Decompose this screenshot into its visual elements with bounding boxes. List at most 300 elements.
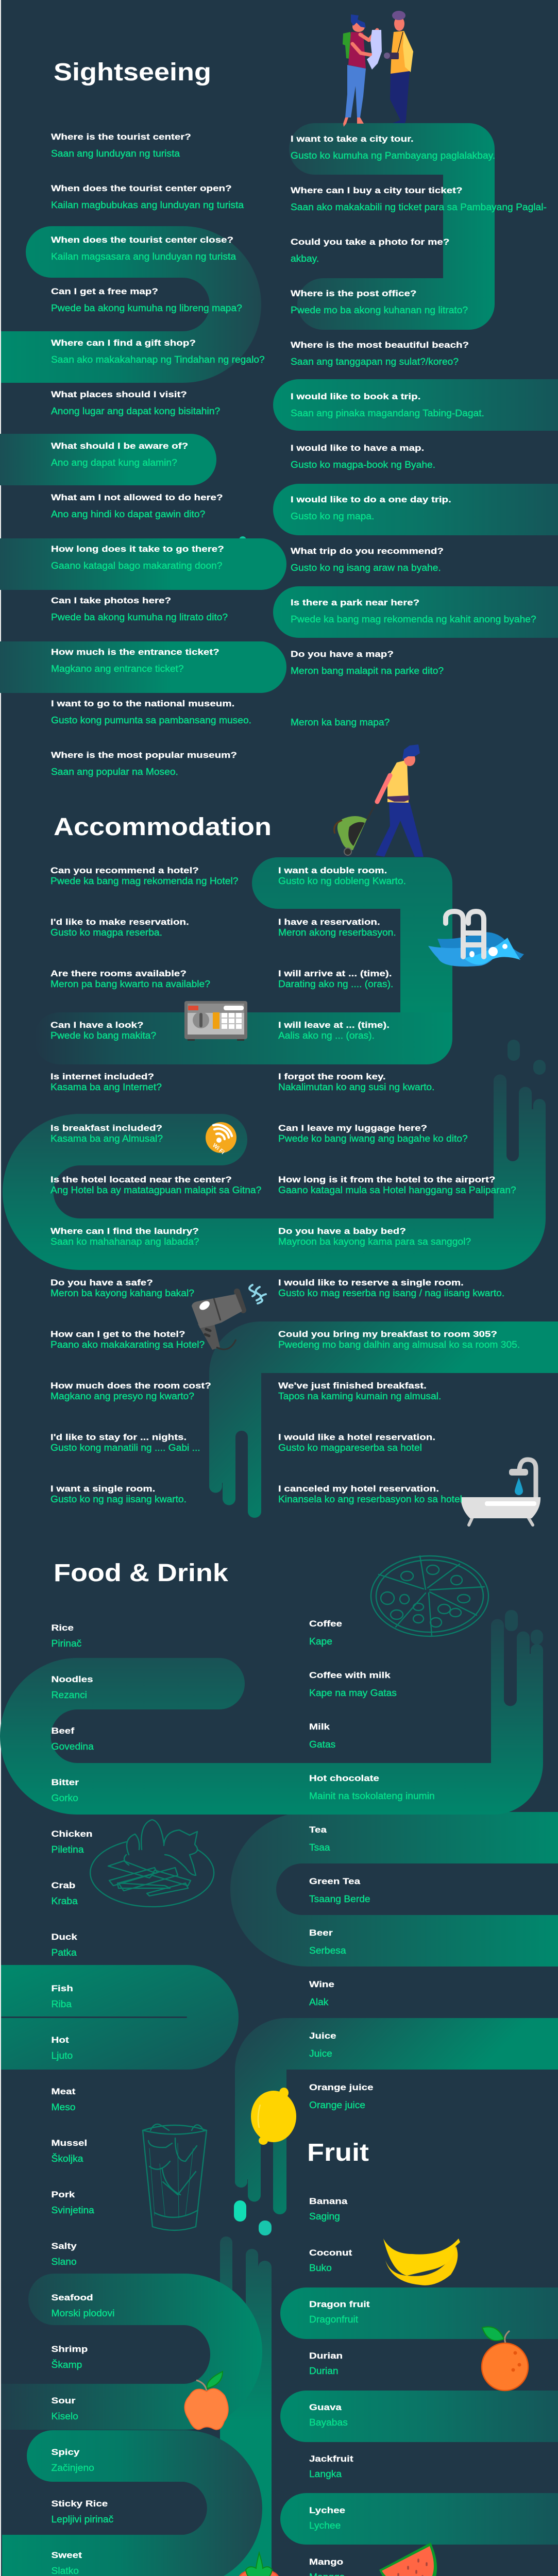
phrase Milk: Milk xyxy=(309,1722,330,1732)
phrase R3: I will arrive at ... (time). xyxy=(278,969,392,978)
icon: wifi badge xyxy=(206,1122,236,1156)
phrase R11: We've just finished breakfast. xyxy=(278,1381,427,1391)
phrase Sweet xyxy=(52,2550,82,2576)
man pants xyxy=(390,71,410,123)
phrase R5 xyxy=(291,340,469,367)
phrase R9 xyxy=(278,1278,504,1298)
phrase R7: I would like to have a map. xyxy=(291,443,424,453)
phrase R10: Could you bring my breakfast to room 305? xyxy=(278,1329,497,1339)
phrase L13: Gusto ko ng nag iisang kwarto. xyxy=(50,1494,187,1504)
phrase Crab: Kraba xyxy=(52,1895,78,1906)
phrase L2: Gusto ko magpa reserba. xyxy=(50,927,162,938)
phrase Orange juice: Orange juice xyxy=(309,2082,374,2092)
ribbon: C curve with drips xyxy=(0,1619,543,1815)
phrase L4: Pwede ko bang makita? xyxy=(50,1030,156,1041)
backpack xyxy=(343,32,352,59)
phrase Fish: Riba xyxy=(52,1998,72,2009)
phrase R11 xyxy=(291,649,444,676)
phrase R3: Could you take a photo for me? xyxy=(291,237,449,247)
ribbon: lychee band xyxy=(280,2493,558,2545)
toppings xyxy=(381,1565,470,1627)
phrase L8: Saan ko mahahanap ang labada? xyxy=(50,1236,199,1247)
phrase R10: Pwede ka bang mag rekomenda ng kahit anong byahe? xyxy=(291,614,536,624)
bubble large xyxy=(488,947,498,956)
phrase L2: I'd like to make reservation. xyxy=(50,917,189,927)
phrase L9: How long does it take to go there? xyxy=(51,544,224,554)
man shirt xyxy=(391,31,413,74)
wifi arcs xyxy=(213,1125,232,1139)
phrase Beer: Beer xyxy=(309,1928,333,1938)
phrase R9: Gusto ko ng isang araw na byahe. xyxy=(291,562,441,573)
orange stem xyxy=(505,2331,510,2343)
glass rim xyxy=(143,2125,207,2134)
handle xyxy=(367,804,376,820)
phrase Salty: Slano xyxy=(52,2256,77,2267)
white display xyxy=(224,1006,244,1010)
title: Sightseeing: Sightseeing xyxy=(54,58,211,86)
phrase Crab: Crab xyxy=(51,1880,75,1890)
phrase L9: Do you have a safe? xyxy=(50,1278,153,1287)
phrase Hot chocolate: Mainit na tsokolateng inumin xyxy=(309,1790,435,1801)
wind xyxy=(249,1285,266,1303)
phrase Beef xyxy=(52,1726,94,1752)
woman hair xyxy=(351,14,366,28)
phrase L13: Saan ang popular na Moseo. xyxy=(51,766,178,777)
phrase Rice: Rice xyxy=(51,1623,74,1633)
phrase Hot xyxy=(52,2035,73,2061)
phrase L1: Pwede ka bang mag rekomenda ng Hotel? xyxy=(50,875,238,886)
phrase R9: Gusto ko mag reserba ng isang / nag iisang kwarto. xyxy=(278,1287,504,1298)
orange dimples xyxy=(513,2353,519,2370)
badge circle xyxy=(206,1122,236,1153)
phrase R1 xyxy=(278,866,406,886)
phrase L5: Where can I find a gift shop? xyxy=(51,338,196,348)
ladder xyxy=(446,911,484,957)
phrase Dragon fruit: Dragonfruit xyxy=(309,2314,359,2325)
phrase R6: Can I leave my luggage here? xyxy=(278,1123,427,1133)
flesh xyxy=(382,2546,434,2576)
ribbon: long column to water band xyxy=(1,2236,272,2576)
phrase Sour: Sour xyxy=(51,2396,76,2405)
suitcase shell xyxy=(337,816,367,850)
icon: iced drink sketch xyxy=(143,2124,207,2230)
phrase L1: Where is the tourist center? xyxy=(51,132,191,142)
shower head xyxy=(509,1469,528,1476)
front wave xyxy=(464,938,520,964)
phrase L9 xyxy=(50,1278,194,1298)
phrase Orange juice xyxy=(309,2082,374,2110)
banana front xyxy=(383,2239,460,2276)
phrase L11: Magkano ang presyo ng kwarto? xyxy=(50,1391,194,1401)
phrase Pork xyxy=(52,2190,94,2215)
phrase Wine: Wine xyxy=(309,1979,334,1989)
phrase Mussel: Školjka xyxy=(52,2153,83,2164)
phrase Sour: Kiselo xyxy=(52,2411,78,2421)
ribbon: right band park xyxy=(273,586,558,638)
camera xyxy=(386,53,399,59)
ribbon: left band entrance ticket xyxy=(0,641,286,693)
phrase L7 xyxy=(51,441,188,468)
phrase L2: When does the tourist center open? xyxy=(51,183,232,193)
icon: orange xyxy=(482,2327,528,2391)
plate xyxy=(90,1842,214,1907)
chicken pieces xyxy=(124,1820,197,1875)
wifi label: Wi Fi xyxy=(211,1142,226,1156)
phrase Milk xyxy=(309,1722,335,1750)
phrase Chicken: Chicken xyxy=(51,1829,92,1839)
fanny pack xyxy=(387,795,410,802)
suitcase interior xyxy=(348,822,365,846)
phrase Seafood: Seafood xyxy=(51,2293,93,2302)
phrase R12: Meron ka bang mapa? xyxy=(291,717,390,727)
phrase R9: What trip do you recommend? xyxy=(291,546,444,556)
phrase R2: Meron akong reserbasyon. xyxy=(278,927,396,938)
phrase R11: Do you have a map? xyxy=(291,649,394,659)
pizza inner rim xyxy=(376,1560,483,1632)
phrase R13 xyxy=(278,1484,462,1504)
phrase L5: Kasama ba ang Internet? xyxy=(50,1081,162,1092)
phrase L10: Paano ako makakarating sa Hotel? xyxy=(50,1339,205,1350)
phrase Hot chocolate xyxy=(309,1773,435,1801)
phrase L13: I want a single room. xyxy=(50,1484,155,1494)
phrase L10: How can I get to the hotel? xyxy=(50,1329,185,1339)
phrase Tea xyxy=(309,1825,330,1853)
phrase Fish xyxy=(52,1984,73,2009)
ribbon: left band aware xyxy=(0,434,216,485)
title: Fruit: Fruit xyxy=(307,2139,369,2166)
phrase L12: Gusto kong manatili ng .... Gabi ... xyxy=(50,1442,200,1453)
phrase R6 xyxy=(278,1123,468,1144)
phrase R2: I have a reservation. xyxy=(278,917,380,927)
phrase Shrimp: Shrimp xyxy=(51,2344,88,2354)
phrase Guava xyxy=(309,2402,348,2428)
phrase Durian xyxy=(309,2351,343,2376)
phrase Fish: Fish xyxy=(51,1984,73,1993)
phrase L1 xyxy=(51,132,191,159)
phrase R11: Meron bang malapit na parke dito? xyxy=(291,665,444,676)
woman feet xyxy=(343,117,364,127)
phrase Sweet: Sweet xyxy=(51,2550,82,2560)
divider slit xyxy=(1,2016,187,2018)
pipe xyxy=(519,1460,536,1499)
phrase Bitter: Gorko xyxy=(52,1792,78,1803)
phrase L6: What places should I visit? xyxy=(51,389,187,399)
phrase Sweet: Slatko xyxy=(52,2565,79,2576)
phrase L13 xyxy=(50,1484,187,1504)
body stripe xyxy=(214,1298,221,1320)
ribbon: lower band xyxy=(34,1012,452,1064)
phrase Durian: Durian xyxy=(309,2365,339,2376)
phrase Mussel: Mussel xyxy=(51,2138,87,2148)
phrase L2: Kailan magbubukas ang lunduyan ng turista xyxy=(51,199,244,210)
phrase Meat xyxy=(52,2087,76,2112)
phrase L7: Ang Hotel ba ay matatagpuan malapit sa Gitna? xyxy=(50,1184,261,1195)
phrase Banana: Banana xyxy=(309,2196,348,2206)
phrase R12 xyxy=(278,1432,435,1453)
phrase L6: Kasama ba ang Almusal? xyxy=(50,1133,163,1144)
suitcase strap xyxy=(334,820,342,834)
wheel xyxy=(344,848,351,855)
ribbon: right band book a trip xyxy=(273,379,558,431)
phrase Juice: Juice xyxy=(309,2048,332,2059)
head xyxy=(404,753,415,766)
phrase R7 xyxy=(278,1175,516,1195)
phrase Noodles xyxy=(52,1674,93,1700)
man hair xyxy=(392,11,405,20)
phrase Coffee with milk: Kape na may Gatas xyxy=(309,1687,397,1698)
phrase L11: How much does the room cost? xyxy=(50,1381,211,1391)
phrase R5: Nakalimutan ko ang susi ng kwarto. xyxy=(278,1081,434,1092)
banana back xyxy=(385,2246,458,2285)
phrase R4: Aalis ako ng ... (oras). xyxy=(278,1030,375,1041)
ribbon: C curve with drips xyxy=(3,1075,546,1270)
phrase R2: Where can I buy a city tour ticket? xyxy=(291,185,463,195)
phrase R8 xyxy=(291,495,451,521)
phrase Pork: Svinjetina xyxy=(52,2205,94,2215)
phrase Lychee xyxy=(309,2505,345,2531)
phrase R4: I will leave at ... (time). xyxy=(278,1020,390,1030)
ribbon: dragon fruit band xyxy=(280,2287,558,2339)
phrase L10 xyxy=(51,596,228,622)
apple leaf xyxy=(207,2371,223,2388)
phrase Lychee: Lychee xyxy=(309,2520,341,2531)
phrase Green Tea: Green Tea xyxy=(309,1876,361,1886)
rind xyxy=(379,2543,437,2576)
phrase L1: Saan ang lunduyan ng turista xyxy=(51,148,180,159)
phrase Sticky Rice: Lepljivi pirinač xyxy=(52,2514,113,2524)
phrase Spicy: Začinjeno xyxy=(52,2462,94,2473)
lemon tip top xyxy=(279,2088,289,2098)
phrase R12: I would like a hotel reservation. xyxy=(278,1432,435,1442)
phrase Coconut xyxy=(309,2248,352,2273)
phrase L5 xyxy=(51,338,265,365)
camera lens xyxy=(384,53,390,59)
phrase Noodles: Rezanci xyxy=(52,1689,87,1700)
phrase R1: I want a double room. xyxy=(278,866,387,875)
phrase R4: Where is the post office? xyxy=(291,289,416,298)
phrase L9: Gaano katagal bago makarating doon? xyxy=(51,560,222,571)
ice at bottom xyxy=(155,2210,198,2217)
ribbon: seafood S curve xyxy=(1,2274,262,2430)
phrase L11 xyxy=(50,1381,211,1401)
keypad xyxy=(222,1013,242,1029)
phrase Bitter xyxy=(52,1777,79,1803)
phrase L6 xyxy=(51,389,220,416)
tub xyxy=(461,1497,540,1518)
phrase L4 xyxy=(50,1020,156,1041)
panel: food and drink xyxy=(0,1556,558,2576)
ribbon: right top hook xyxy=(289,123,495,330)
phrase Juice xyxy=(309,2031,336,2059)
phrase L5: Is internet included? xyxy=(50,1072,154,1081)
woman arms xyxy=(352,30,377,55)
phrase L13: Where is the most popular museum? xyxy=(51,750,237,760)
phrase R10 xyxy=(278,1329,520,1350)
phrase L4: Pwede ba akong kumuha ng libreng mapa? xyxy=(51,302,242,313)
phrase R6 xyxy=(291,392,484,418)
ribbon: spicy S curve xyxy=(2,2430,262,2576)
ribbon: top right bar with drips xyxy=(209,1321,558,1518)
drop 2 xyxy=(531,1630,543,1645)
safe panel xyxy=(188,1004,244,1014)
shirt xyxy=(387,760,409,803)
slices xyxy=(379,1556,484,1636)
phrase Coffee: Coffee xyxy=(309,1619,342,1629)
bubbles xyxy=(469,951,475,957)
phrase R1 xyxy=(291,134,495,161)
apple body xyxy=(184,2389,228,2430)
phrase Tea: Tsaa xyxy=(309,1842,330,1853)
phrase L12: I'd like to stay for ... nights. xyxy=(50,1432,187,1442)
phrase L6: Anong lugar ang dapat kong bisitahin? xyxy=(51,405,220,416)
phrase Bitter: Bitter xyxy=(51,1777,79,1787)
safe door xyxy=(188,1013,244,1035)
phrase Jackfruit: Jackfruit xyxy=(309,2454,353,2464)
phrase L8: Where can I find the laundry? xyxy=(50,1226,199,1236)
phrase R5: Where is the most beautiful beach? xyxy=(291,340,469,350)
phrase Sticky Rice xyxy=(52,2499,113,2524)
phrase L3: Kailan magsasara ang lunduyan ng turista xyxy=(51,251,236,262)
phrase Sticky Rice: Sticky Rice xyxy=(51,2499,108,2509)
phrase Banana xyxy=(309,2196,348,2222)
nozzle xyxy=(237,1292,243,1310)
phrase L4 xyxy=(51,286,242,313)
phrase Juice: Juice xyxy=(309,2031,336,2041)
phrase Beef: Govedina xyxy=(52,1741,94,1752)
phrase L8: Ano ang hindi ko dapat gawin dito? xyxy=(51,509,205,519)
phrase R2: Saan ako makakabili ng ticket para sa Pambayang Paglal- xyxy=(291,201,547,212)
lemon highlight xyxy=(258,2105,260,2128)
phrase Dragon fruit: Dragon fruit xyxy=(309,2299,370,2309)
phrase R2 xyxy=(291,185,547,212)
phrase L4: Can I have a look? xyxy=(50,1020,144,1030)
knob xyxy=(193,1012,209,1028)
phrase Coconut: Coconut xyxy=(309,2248,352,2258)
phrase Meat: Meat xyxy=(51,2087,76,2096)
phrase Banana: Saging xyxy=(309,2211,340,2222)
tub highlight xyxy=(485,1501,536,1506)
phrase Wine: Alak xyxy=(309,1996,329,2007)
strawberry body xyxy=(237,2568,281,2576)
phrase Rice: Pirinač xyxy=(52,1638,81,1649)
phrase L10: Pwede ba akong kumuha ng litrato dito? xyxy=(51,612,228,622)
phrase Guava: Guava xyxy=(309,2402,342,2412)
phrase Rice xyxy=(52,1623,81,1649)
icon: plate with fries sketch xyxy=(90,1820,214,1907)
phrase L5: Saan ako makakahanap ng Tindahan ng regalo? xyxy=(51,354,265,365)
phrase Pork: Pork xyxy=(51,2190,75,2199)
phrase Duck xyxy=(52,1932,77,1958)
phrase Crab xyxy=(52,1880,78,1906)
phrase R8: I would like to do a one day trip. xyxy=(291,495,451,504)
mid wave xyxy=(428,945,500,967)
phrase R3: akbay. xyxy=(291,253,319,264)
phrase R6: Pwede ko bang iwang ang bagahe ko dito? xyxy=(278,1133,468,1144)
ribbon: right S curve tea and beer xyxy=(230,1812,558,1967)
icon: strawberry xyxy=(237,2553,281,2576)
phrase Salty: Salty xyxy=(51,2241,77,2251)
phrase L8 xyxy=(51,493,223,519)
phrase Milk: Gatas xyxy=(309,1739,335,1750)
phrase R3 xyxy=(291,237,449,264)
red button xyxy=(188,1006,198,1010)
body xyxy=(192,1294,242,1328)
icon: watermelon xyxy=(379,2543,437,2576)
phrase R13: Kinansela ko ang reserbasyon ko sa hotel xyxy=(278,1494,462,1504)
phrase Guava: Bayabas xyxy=(309,2417,348,2428)
phrase Mango xyxy=(309,2557,345,2576)
phrase L3 xyxy=(51,235,236,262)
phrase Shrimp: Škamp xyxy=(52,2359,82,2370)
phrase R4: Pwede mo ba akong kuhanan ng litrato? xyxy=(291,304,468,315)
phrase L3 xyxy=(50,969,210,989)
phrase R3 xyxy=(278,969,393,989)
lemon tip bottom xyxy=(259,2137,268,2145)
phrase R10 xyxy=(291,598,536,624)
phrase R5 xyxy=(278,1072,434,1092)
orange strip xyxy=(213,1012,219,1029)
phrase Coconut: Buko xyxy=(309,2262,332,2273)
phrase L12: Gusto kong pumunta sa pambansang museo. xyxy=(51,715,251,725)
ribbon: left S curve xyxy=(1,226,261,383)
phrase L5 xyxy=(50,1072,162,1092)
illustration: traveller with suitcase xyxy=(334,744,424,857)
phrase L8: What am I not allowed to do here? xyxy=(51,493,223,502)
phrase L12 xyxy=(51,699,251,725)
phrase R8: Gusto ko ng mapa. xyxy=(291,511,374,521)
left page edge xyxy=(0,0,1,2576)
cord xyxy=(216,1340,236,1349)
fries xyxy=(108,1861,191,1896)
safe feet xyxy=(188,1038,244,1041)
phrase Spicy: Spicy xyxy=(51,2447,80,2457)
drop 1 xyxy=(508,1040,520,1061)
phrase L3: Are there rooms available? xyxy=(50,969,187,978)
strawberry leaf xyxy=(246,2553,272,2576)
ribbon: top hook xyxy=(252,857,452,1013)
phrase Duck: Patka xyxy=(52,1947,77,1958)
phrase Green Tea: Tsaang Berde xyxy=(309,1893,370,1904)
phrase Jackfruit: Langka xyxy=(309,2468,342,2479)
phrase Hot chocolate: Hot chocolate xyxy=(309,1773,379,1783)
camera strap xyxy=(398,32,403,53)
phrase Jackfruit xyxy=(309,2454,353,2479)
arm xyxy=(377,775,390,802)
glass hatch xyxy=(149,2143,193,2218)
phrase R4 xyxy=(278,1020,390,1041)
phrase R10: Pwedeng mo bang dalhin ang almusal ko sa room 305. xyxy=(278,1339,520,1350)
man sleeve xyxy=(403,31,413,72)
phrase Hot: Ljuto xyxy=(52,2050,73,2061)
water drop xyxy=(515,1478,523,1495)
phrase Duck: Duck xyxy=(51,1932,77,1942)
phrase R3: Darating ako ng .... (oras). xyxy=(278,978,393,989)
woman head xyxy=(352,22,365,32)
icon: banana xyxy=(383,2239,460,2285)
phrase Salty xyxy=(52,2241,77,2267)
phrase Shrimp xyxy=(52,2344,88,2370)
phrase L3: When does the tourist center close? xyxy=(51,235,233,245)
man head xyxy=(394,16,404,31)
phrase L6 xyxy=(50,1123,163,1144)
bubble small xyxy=(502,944,508,949)
drop: bright teal 1 xyxy=(234,2200,246,2222)
phrase L9: Meron ba kayong kahang bakal? xyxy=(50,1287,194,1298)
phrase L7: What should I be aware of? xyxy=(51,441,188,451)
orange body xyxy=(482,2343,528,2391)
phrase Orange juice: Orange juice xyxy=(309,2099,365,2110)
phrase R7: How long is it from the hotel to the airport? xyxy=(278,1175,495,1184)
